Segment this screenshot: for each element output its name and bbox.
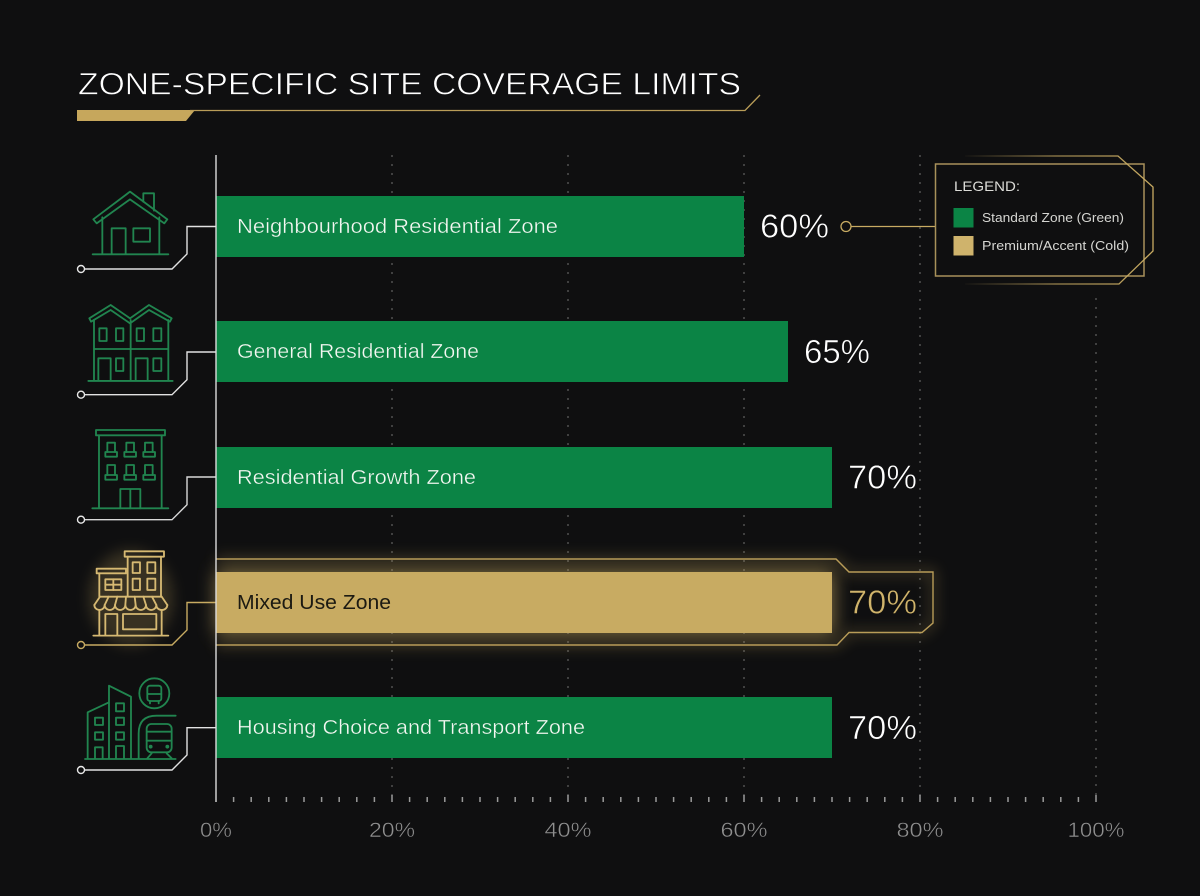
legend heading: LEGEND: bbox=[954, 178, 1020, 194]
bar label: Housing Choice and Transport Zone bbox=[237, 717, 585, 739]
title underline accent bbox=[77, 95, 760, 121]
bar label: Neighbourhood Residential Zone bbox=[237, 216, 558, 238]
axis tick marks bbox=[234, 795, 1096, 802]
value: 65% bbox=[804, 333, 870, 370]
bar label: Mixed Use Zone bbox=[237, 592, 391, 614]
value: 70% bbox=[848, 584, 917, 620]
row: Neighbourhood Residential Zone bbox=[78, 192, 829, 272]
legend item: standard bbox=[954, 208, 1124, 228]
bar bbox=[216, 447, 832, 508]
icon glow bbox=[89, 550, 173, 646]
vertical gridlines bbox=[392, 155, 1096, 802]
connector bbox=[81, 602, 216, 645]
bar label: Residential Growth Zone bbox=[237, 467, 476, 489]
connector bbox=[81, 226, 216, 269]
row: General Residential Zone bbox=[78, 305, 870, 398]
icon: apartment building bbox=[92, 430, 168, 508]
axis labels: 100% bbox=[1068, 819, 1124, 842]
bar bbox=[216, 196, 744, 257]
legend outer frame bbox=[965, 156, 1153, 284]
axis labels: 20% bbox=[369, 819, 415, 842]
axis labels: 60% bbox=[720, 819, 768, 842]
connector bbox=[81, 477, 216, 520]
icon: duplex bbox=[88, 305, 173, 381]
legend item: standard: Standard Zone (Green) bbox=[982, 210, 1124, 225]
legend item: premium: Premium/Accent (Cold) bbox=[982, 238, 1129, 253]
bar glow bbox=[216, 570, 834, 635]
row: Mixed Use Zone (highlighted) bbox=[78, 550, 933, 648]
bar bbox=[216, 321, 788, 382]
bar bbox=[216, 697, 832, 758]
legend bbox=[936, 156, 1153, 284]
icon: shopfront bbox=[93, 551, 168, 636]
connector bbox=[81, 728, 216, 770]
axis labels bbox=[200, 819, 1124, 842]
icon: house bbox=[93, 192, 168, 254]
highlight frame bbox=[216, 559, 933, 645]
axis labels: 40% bbox=[544, 819, 592, 842]
bar bbox=[216, 572, 832, 633]
axis labels: 80% bbox=[896, 819, 944, 842]
legend leader line bbox=[841, 222, 935, 232]
connector bbox=[81, 352, 216, 395]
row: Housing Choice and Transport Zone bbox=[78, 678, 917, 774]
value: 60% bbox=[760, 208, 829, 244]
axis labels: 0% bbox=[200, 819, 232, 842]
value frame glow bbox=[216, 559, 933, 645]
bar label: General Residential Zone bbox=[237, 341, 479, 363]
legend item: premium bbox=[954, 236, 1129, 256]
icon: buildings and transit bbox=[85, 678, 176, 759]
title: ZONE-SPECIFIC SITE COVERAGE LIMITS bbox=[78, 66, 741, 102]
row: Residential Growth Zone bbox=[78, 430, 917, 523]
vertical axis bbox=[215, 155, 217, 802]
value: 70% bbox=[848, 458, 917, 496]
value: 70% bbox=[848, 709, 917, 746]
